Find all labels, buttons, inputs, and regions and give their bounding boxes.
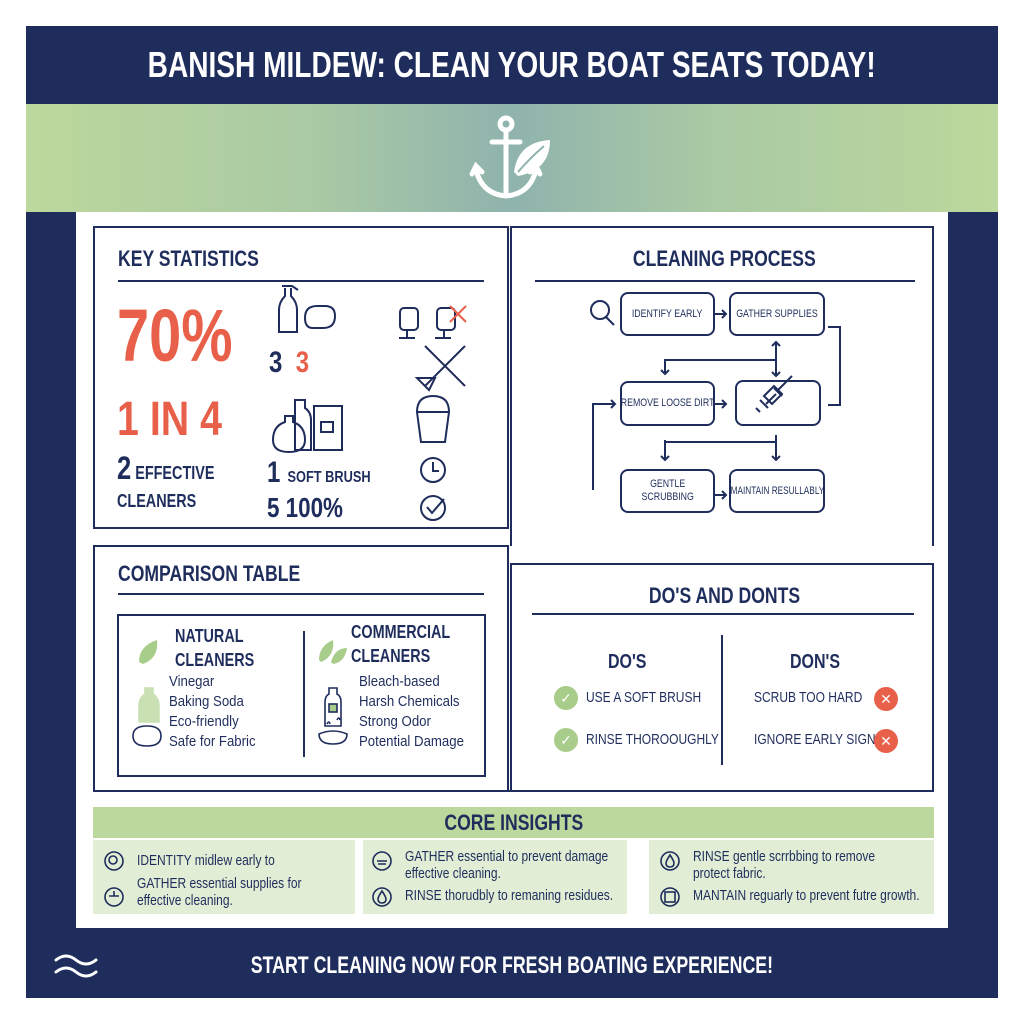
column: natural: CLEANERS xyxy=(175,650,254,670)
heading: CORE INSIGHTS xyxy=(444,810,583,835)
insight 2: GATHER essential to prevent damage xyxy=(405,848,608,865)
table: Harsh Chemicals xyxy=(359,693,459,710)
step: identify early: IDENTIFY EARLY xyxy=(632,308,703,320)
column: natural: NATURAL xyxy=(175,626,244,646)
insight 1: GATHER essential supplies for xyxy=(137,875,302,892)
column: natural xyxy=(175,626,254,670)
insight 2: RINSE thorudbly to remaning residues. xyxy=(405,887,613,904)
step: remove loose dirt: REMOVE LOOSE DIRT xyxy=(621,397,714,409)
column: don'ts: IGNORE EARLY SIGNS xyxy=(754,731,884,748)
table: Strong Odor xyxy=(359,713,431,730)
icon: anchor with leaf xyxy=(470,116,550,198)
column: don'ts: SCRUB TOO HARD xyxy=(754,689,862,706)
table: Safe for Fabric xyxy=(169,733,256,750)
table: Baking Soda xyxy=(169,693,244,710)
panel: comparison table xyxy=(93,545,509,791)
white content xyxy=(76,212,948,928)
column: don'ts: ✕ xyxy=(880,733,892,749)
step: maintain xyxy=(729,469,825,513)
column: don'ts xyxy=(754,651,898,753)
table xyxy=(117,614,486,777)
green banner xyxy=(26,104,998,212)
flowchart xyxy=(590,292,841,513)
stat: 3 3: 3 3 xyxy=(269,346,309,379)
column: do's: DO'S xyxy=(608,651,646,673)
step: gentle scrubbing: SCRUBBING xyxy=(641,491,694,503)
footer text: START CLEANING NOW FOR FRESH BOATING EXPERIENCE! xyxy=(251,952,773,979)
stat: 2 effective cleaners xyxy=(117,450,214,511)
table: Eco-friendly xyxy=(169,713,239,730)
step: remove loose dirt xyxy=(620,381,715,426)
column: do's: RINSE THOROOUGHLY xyxy=(586,731,719,748)
column: do's: USE A SOFT BRUSH xyxy=(586,689,701,706)
step: brush xyxy=(735,380,821,426)
stat: soft brush: 1 SOFT BRUSH xyxy=(267,456,371,489)
step: maintain: MAINTAIN RESULLABLY xyxy=(730,484,824,496)
column: commercial: CLEANERS xyxy=(351,646,430,666)
step: identify early xyxy=(620,292,715,336)
title: BANISH MILDEW: CLEAN YOUR BOAT SEATS TODAY! xyxy=(148,44,876,85)
panel: do's and don'ts xyxy=(510,563,934,791)
heading xyxy=(93,807,934,838)
column: don'ts: ✕ xyxy=(880,691,892,707)
step: gentle scrubbing: GENTLE xyxy=(650,478,685,490)
heading: CLEANING PROCESS xyxy=(633,246,815,271)
column: commercial: COMMERCIAL xyxy=(351,622,450,642)
icon: waves xyxy=(54,954,98,978)
insight 3 xyxy=(649,840,934,914)
insight 2 xyxy=(363,840,627,914)
column: don'ts: DON'S xyxy=(790,651,840,673)
insight 3: RINSE gentle scrrbbing to remove xyxy=(693,848,875,865)
stat: 70%: 70% xyxy=(117,294,233,377)
column: do's: ✓ xyxy=(560,690,572,706)
insight 1: IDENTITY midlew early to xyxy=(137,852,275,869)
table: Vinegar xyxy=(169,673,214,690)
stat: 2 effective cleaners: CLEANERS xyxy=(117,491,196,511)
table: Potential Damage xyxy=(359,733,464,750)
column: do's: ✓ xyxy=(560,732,572,748)
column: commercial xyxy=(351,622,450,666)
step: gather supplies xyxy=(729,292,825,336)
step: gentle scrubbing xyxy=(620,469,715,513)
column: do's xyxy=(554,651,719,752)
heading: COMPARISON TABLE xyxy=(118,561,300,586)
step: gather supplies: GATHER SUPPLIES xyxy=(736,308,818,320)
stat: 2 effective cleaners: 2 EFFECTIVE xyxy=(117,450,214,486)
heading: DO'S AND DONTS xyxy=(648,583,800,608)
insight 1: effective cleaning. xyxy=(137,892,233,909)
insight 2: effective cleaning. xyxy=(405,865,501,882)
insight 3: protect fabric. xyxy=(693,865,766,882)
stat: 5 100%: 5 100% xyxy=(267,492,343,523)
panel: core insights xyxy=(93,807,934,914)
table: Bleach-based xyxy=(359,673,440,690)
heading: KEY STATISTICS xyxy=(118,246,259,271)
insight 3: MANTAIN reguarly to prevent futre growth. xyxy=(693,887,920,904)
panel: key statistics xyxy=(93,226,509,529)
panel: cleaning process xyxy=(510,226,934,546)
stat: 1 in 4: 1 IN 4 xyxy=(117,393,222,446)
icons xyxy=(272,285,467,521)
insight 1 xyxy=(93,840,355,914)
